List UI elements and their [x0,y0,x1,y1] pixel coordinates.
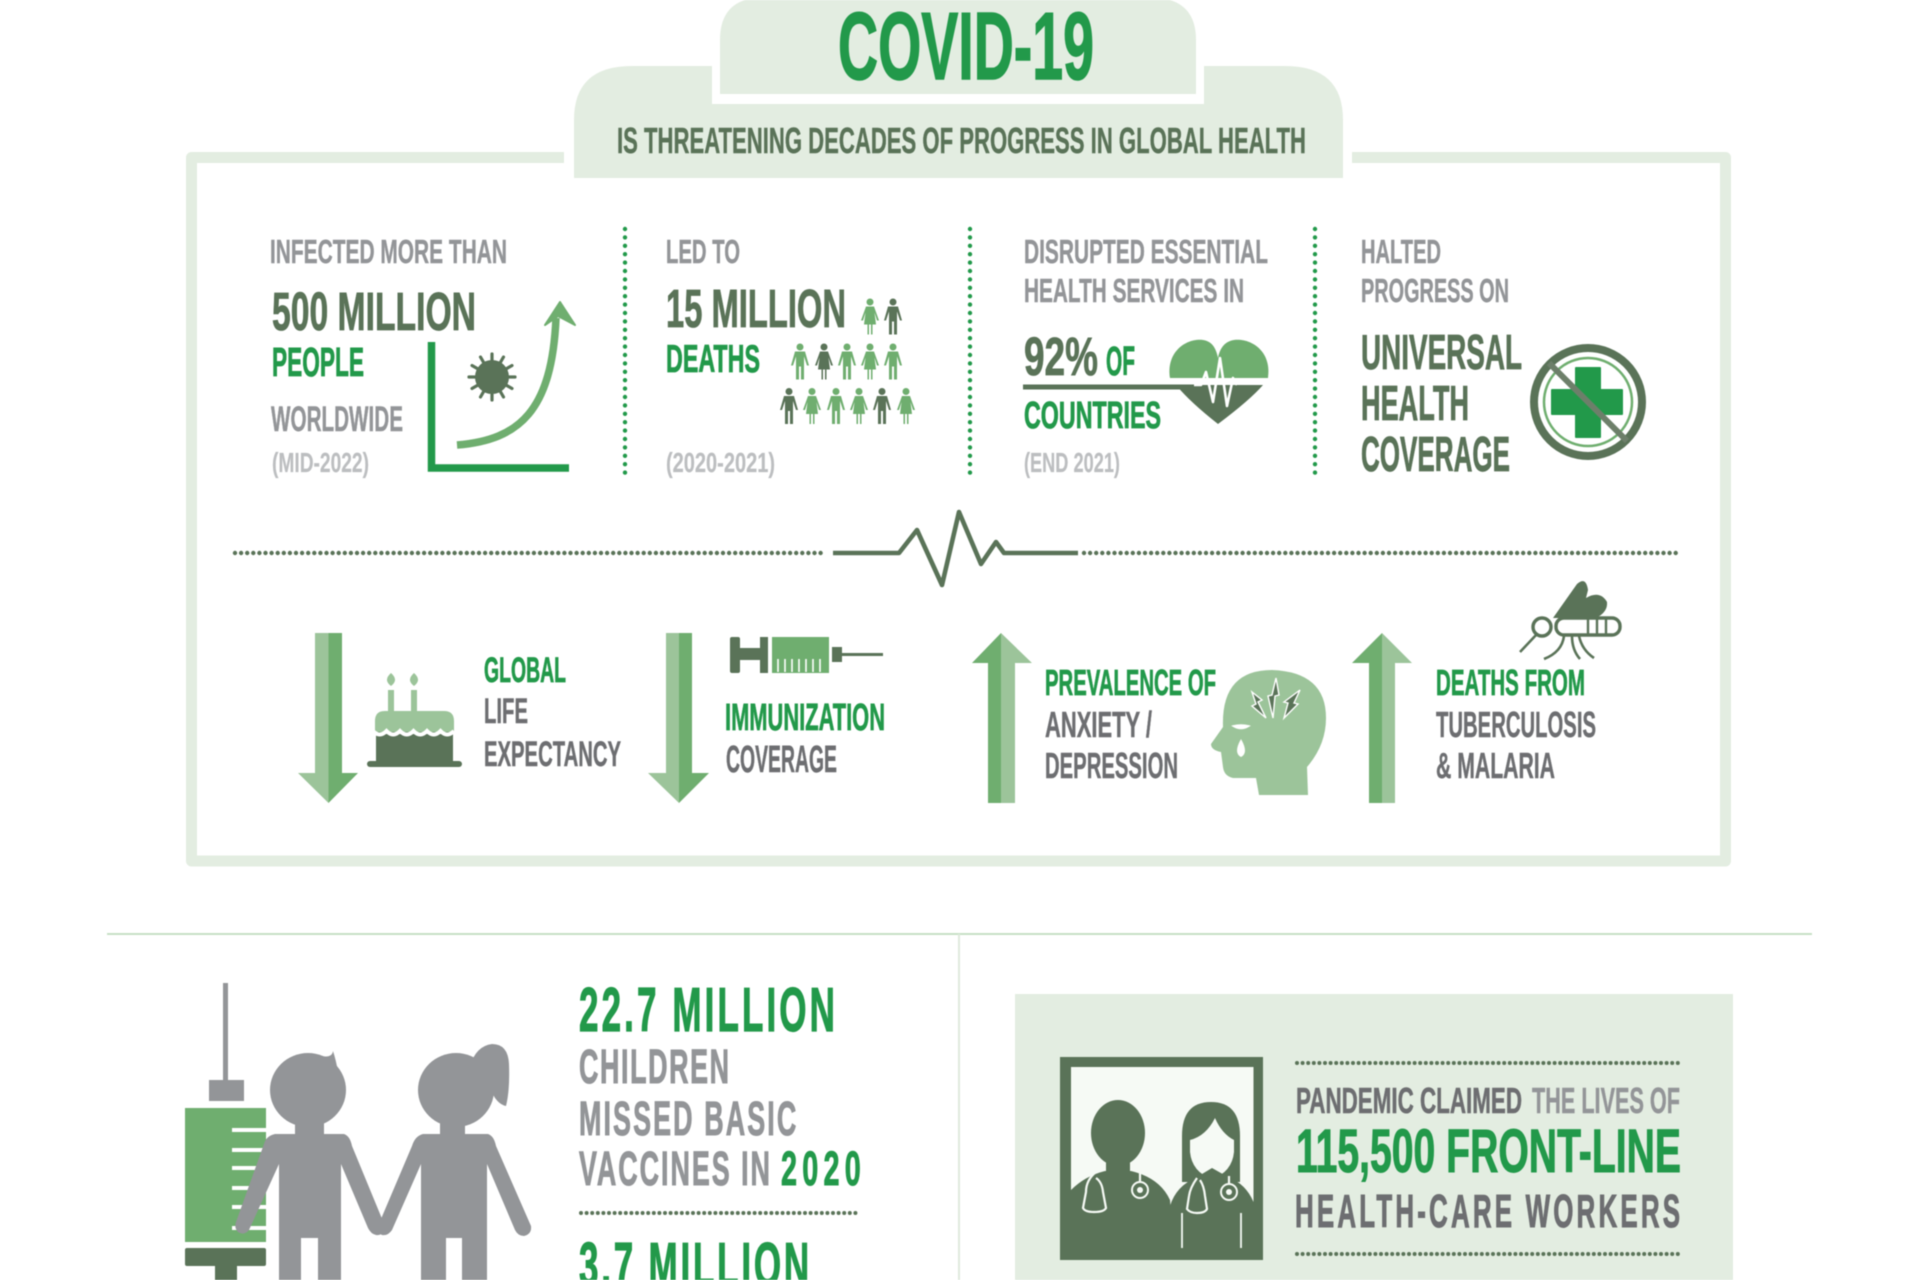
divider: pulse line [235,512,1676,585]
icon: boy [235,1051,385,1280]
divider: 3 [1313,229,1317,474]
text: anxiety: ANXIETY / [1045,704,1152,745]
icon: mosquito [1520,581,1620,659]
text: halted: HALTED [1361,234,1441,271]
icon: crying head [1211,670,1326,795]
text: 2020-2021: (2020-2021) [666,447,775,478]
icon: birthday cake [367,673,462,767]
subtitle: IS THREATENING DECADES OF PROGRESS IN GLOBAL HEALTH [617,120,1306,161]
block: life expectancy [298,633,621,803]
number: 115,500 front-line: 115,500 FRONT-LINE [1296,1117,1681,1185]
icon: virus [469,354,515,400]
text: led to: LED TO [666,234,740,271]
text: health: HEALTH [1361,377,1469,431]
text: universal: UNIVERSAL [1361,326,1522,380]
block: immunization [648,633,885,803]
arrow: down [298,633,358,803]
icon: doctors portrait [1060,1057,1263,1260]
panel frame: global health effects [192,158,1726,861]
text: worldwide: WORLDWIDE [271,400,403,439]
panel: missed vaccines [185,974,861,1280]
number: 22.7 million: 22.7 MILLION [579,974,835,1045]
icon: growth chart [432,302,575,468]
text: mid-2022: (MID-2022) [272,447,369,478]
divider: 2 [968,229,972,474]
panel: health-care workers [1015,994,1733,1280]
text: expectancy: EXPECTANCY [484,735,621,774]
divider: 1 [623,229,627,474]
icon: people group [780,298,915,424]
text: deaths from: DEATHS FROM [1436,662,1585,703]
block: anxiety and depression [972,633,1326,803]
text: deaths: DEATHS [666,338,760,381]
icon: large syringe [185,983,266,1280]
text: end 2021: (END 2021) [1024,447,1120,478]
text: pandemic claimed: PANDEMIC CLAIMED [1296,1080,1522,1121]
text: progress on: PROGRESS ON [1361,273,1509,310]
text: life: LIFE [484,692,528,731]
text: the lives of: THE LIVES OF [1532,1080,1680,1121]
header tab: title background [720,0,1196,94]
text: health-care workers: HEALTH-CARE WORKERS [1295,1185,1680,1237]
text: people: PEOPLE [272,339,364,385]
text: tuberculosis: TUBERCULOSIS [1436,704,1596,745]
text: immunization: IMMUNIZATION [725,697,885,739]
column: infected [270,234,575,478]
arrow: up [1352,633,1412,803]
icon: crossed-out medical cross [1534,348,1642,456]
text: and malaria: & MALARIA [1436,745,1555,786]
text: health services in: HEALTH SERVICES IN [1024,273,1244,310]
arrow: up [972,633,1032,803]
text: countries: COUNTRIES [1024,395,1161,437]
column: deaths [666,234,915,478]
icon: girl [378,1044,531,1280]
text: prevalence of: PREVALENCE OF [1045,662,1216,703]
text: children: CHILDREN [579,1041,729,1094]
column: health services [1023,234,1269,478]
block: tuberculosis and malaria [1352,581,1620,803]
text: of: OF [1106,338,1135,384]
icon: heart with pulse [1023,340,1269,424]
number: 15 million: 15 MILLION [666,279,846,339]
text: depression: DEPRESSION [1045,745,1178,786]
number: 2020: 2020 [781,1143,861,1196]
text: vaccines in: VACCINES IN [579,1143,770,1196]
text: missed basic: MISSED BASIC [579,1093,796,1146]
number: 500 million: 500 MILLION [272,282,476,342]
panel background [1015,994,1733,1280]
text: disrupted essential: DISRUPTED ESSENTIAL [1024,234,1268,271]
icon: syringe [730,637,883,673]
header tab: subtitle background [574,66,1343,178]
column: universal health coverage [1361,234,1642,482]
arrow: down [648,633,709,803]
text: global: GLOBAL [484,651,566,690]
text: infected more than: INFECTED MORE THAN [270,234,507,271]
text: coverage: COVERAGE [1361,428,1510,482]
text: coverage: COVERAGE [726,739,837,781]
number: 92 percent: 92% [1024,327,1098,387]
